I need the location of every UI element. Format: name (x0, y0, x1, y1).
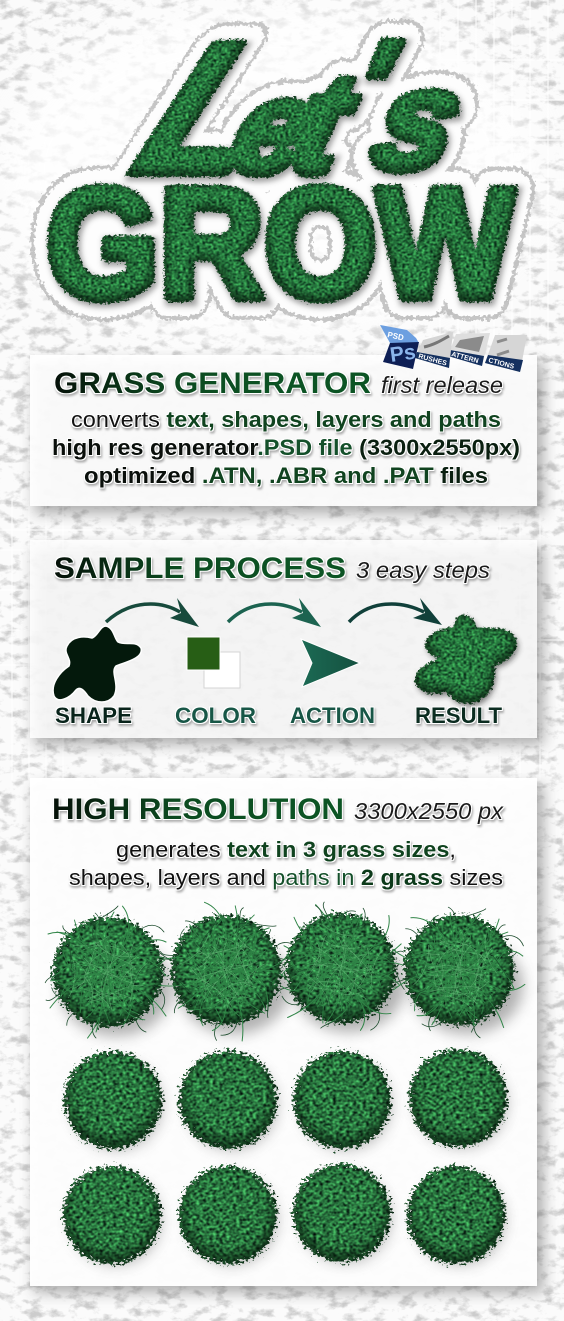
heading: grass generator: GRASS GENERATOR (54, 367, 371, 400)
panel: high resolution (29, 778, 544, 1293)
text block: features (52, 407, 520, 488)
step labels: RESULT (415, 703, 503, 728)
icon: brushes card: RUSHES (417, 353, 448, 368)
title letter shadow: s (361, 45, 481, 201)
heading: sample process: SAMPLE PROCESS (54, 552, 346, 585)
tuft 1 (29, 895, 186, 1045)
heading: grass generator (54, 367, 503, 400)
title grass letters (46, 6, 515, 331)
step labels: COLOR (175, 703, 256, 728)
title outer grey fuzzy outline: ' (335, 15, 409, 160)
title white fuzzy outline (46, 6, 515, 331)
title grass letters: ' (335, 15, 409, 160)
text block: features: converts text, shapes, layers and paths (71, 407, 501, 432)
title outer grey fuzzy outline: e (218, 55, 330, 200)
title grass letters: t (278, 46, 372, 202)
title outer grey fuzzy outline: t (278, 46, 372, 202)
grass tufts: medium size row (64, 1049, 507, 1150)
title grass letters: L (93, 6, 340, 212)
title white fuzzy outline: L (93, 6, 340, 212)
title grass letters: s (359, 42, 479, 198)
title outer grey fuzzy outline: GROW (46, 157, 515, 331)
panel: grass generator (30, 325, 544, 514)
icon: pattern card: ATTERN (450, 351, 479, 365)
heading: sample process (54, 552, 491, 585)
icon: Photoshop file: PSD (387, 330, 405, 342)
panel: sample process (30, 540, 544, 745)
icon: Photoshop file: Ps (388, 341, 417, 367)
icon: Photoshop file (380, 325, 419, 369)
tuft 2 (136, 880, 313, 1058)
text block: features: high res generator .PSD file (3300x2550px) (52, 435, 520, 460)
title outer grey fuzzy outline: L (93, 6, 340, 212)
icon: actions card: CTIONS (487, 357, 515, 371)
title white fuzzy outline: ' (335, 15, 409, 160)
tuft 4 (382, 890, 536, 1049)
heading: grass generator: first release (381, 372, 503, 398)
heading: high resolution: HIGH RESOLUTION (52, 793, 344, 826)
title grass letters: e (218, 55, 330, 200)
tuft 3 (265, 893, 417, 1045)
text block: features: optimized .ATN, .ABR and .PAT files (84, 463, 488, 488)
title: Let's GROW grass lettering (46, 6, 517, 334)
icon: colour swatch (187, 637, 240, 688)
title letter shadow (48, 9, 517, 334)
arrow: shape to color (106, 598, 199, 627)
arrow: color to action (228, 598, 321, 627)
heading: high resolution: 3300x2550 px (354, 798, 505, 824)
heading: sample process: 3 easy steps (356, 557, 491, 583)
title outer grey fuzzy outline (46, 6, 515, 331)
heading: high resolution (52, 793, 505, 826)
text block: grass sizes: shapes, layers and paths in 2 grass sizes (69, 865, 503, 890)
icon: file set (380, 325, 527, 372)
step labels (55, 703, 503, 728)
title grass letters: GROW (46, 157, 515, 331)
title letter shadow: e (220, 58, 332, 203)
icon: action triangle (301, 639, 360, 687)
title letter shadow: ' (337, 18, 411, 163)
grass tufts: large size row (29, 880, 536, 1058)
title letter shadow: L (95, 9, 342, 215)
grass tufts: small size row (63, 1164, 505, 1265)
title white fuzzy outline: s (359, 42, 479, 198)
icon: shape blob (53, 626, 141, 702)
icon: grass result (418, 618, 515, 703)
icon: actions card (485, 335, 527, 372)
title outer grey fuzzy outline: s (359, 42, 479, 198)
icon: brushes card (415, 332, 453, 368)
icon: pattern card (448, 333, 490, 366)
step labels: ACTION (290, 703, 375, 728)
title letter shadow: t (280, 49, 374, 205)
text block: grass sizes (69, 837, 503, 890)
title white fuzzy outline: GROW (46, 157, 515, 331)
text block: grass sizes: generates text in 3 grass sizes , (116, 837, 456, 862)
title letter shadow: GROW (48, 160, 517, 334)
arrow: action to result (349, 598, 442, 625)
title white fuzzy outline: e (218, 55, 330, 200)
step labels: SHAPE (55, 703, 132, 728)
title white fuzzy outline: t (278, 46, 372, 202)
